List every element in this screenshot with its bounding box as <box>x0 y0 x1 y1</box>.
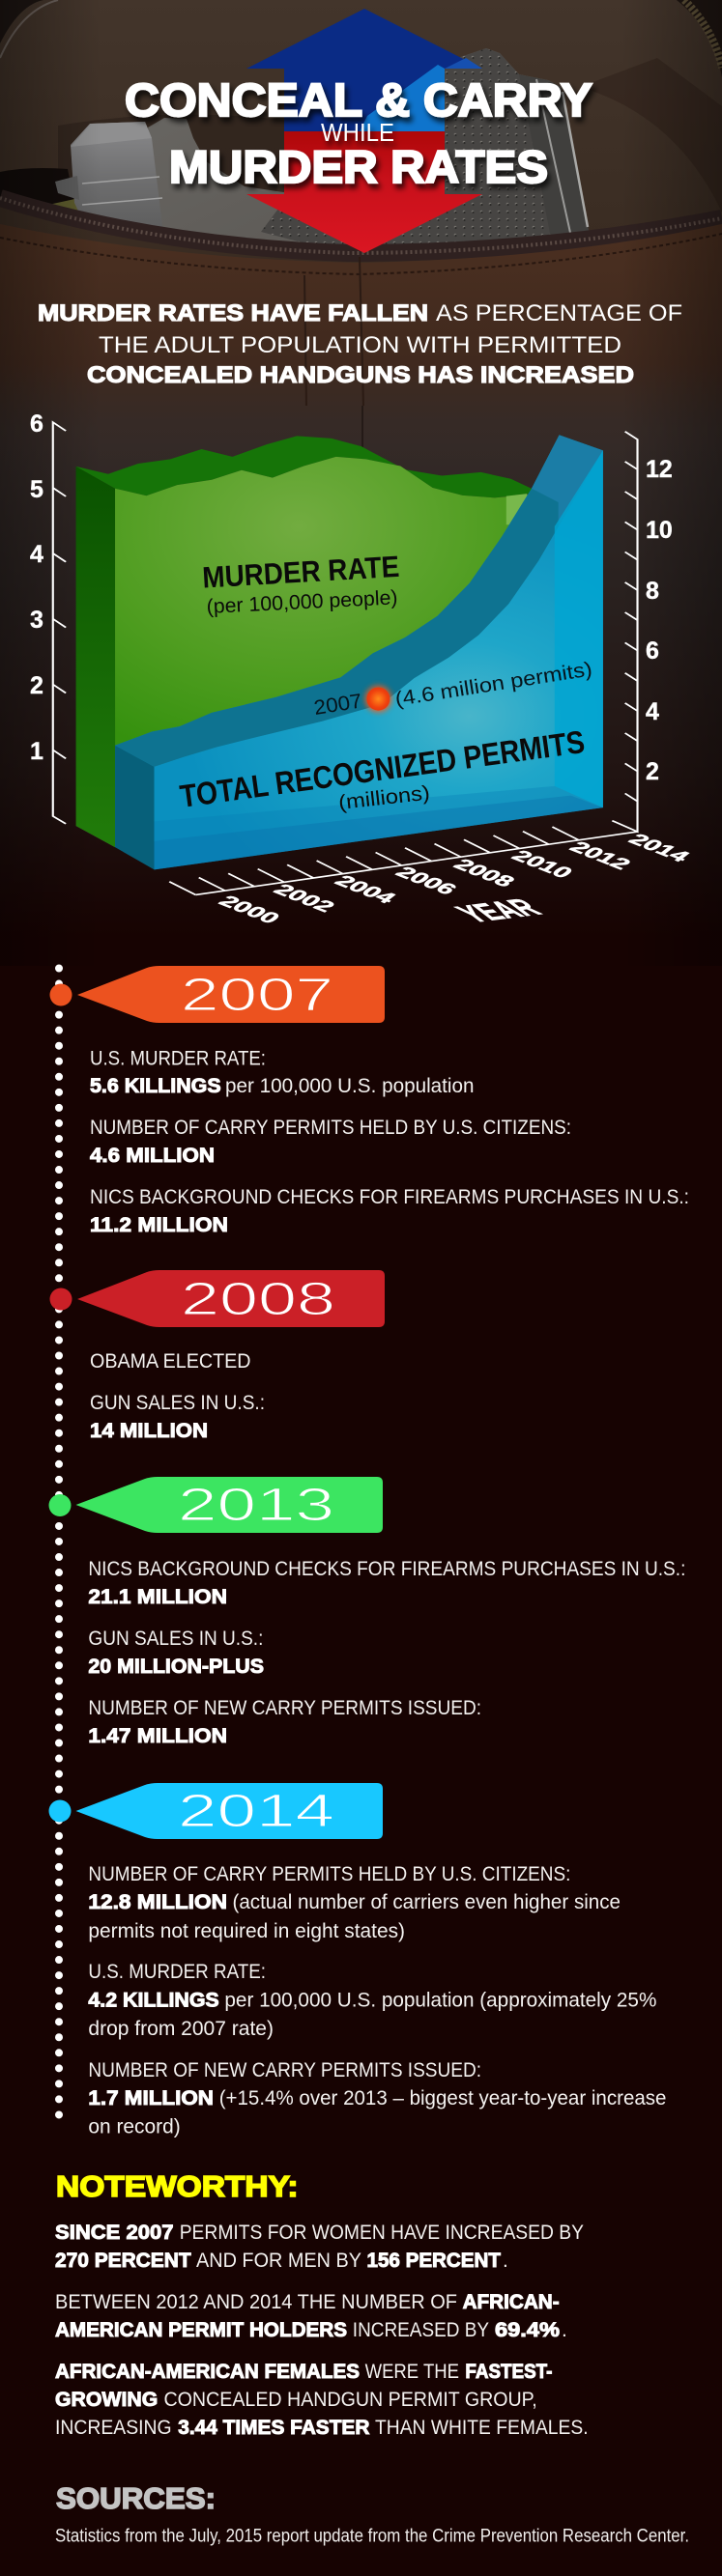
noteworthy facts: AFRICAN-AMERICAN FEMALES <box>55 2361 360 2383</box>
noteworthy facts: WERE THE <box>365 2361 459 2383</box>
timeline dotted line <box>55 968 63 2131</box>
2013 facts <box>88 1558 685 1747</box>
noteworthy facts: INCREASED BY <box>353 2319 489 2341</box>
title: MURDER RATES <box>169 141 548 192</box>
2013 facts: NUMBER OF NEW CARRY PERMITS ISSUED: <box>88 1697 481 1719</box>
murder rate label <box>201 550 400 618</box>
year axis labels: 2014 <box>623 831 695 865</box>
2014 facts: 4.2 KILLINGS <box>88 1990 219 2011</box>
subheading <box>38 300 682 388</box>
timeline marker 2013: 2013 <box>178 1480 334 1531</box>
year axis labels: 2002 <box>269 881 339 916</box>
2007 marker callout: (4.6 million permits) <box>393 658 593 711</box>
noteworthy facts: FASTEST- <box>465 2361 552 2383</box>
2007 facts: U.S. MURDER RATE: <box>90 1047 266 1070</box>
permits blue area <box>115 435 603 869</box>
2007 facts: 5.6 KILLINGS <box>90 1075 221 1097</box>
noteworthy facts: INCREASING <box>55 2417 172 2439</box>
year axis labels: 2012 <box>564 838 636 873</box>
icon: blue up arrow and red down arrow <box>246 9 482 253</box>
year axis labels <box>214 831 695 927</box>
2008 facts: 14 MILLION <box>90 1420 208 1442</box>
noteworthy facts: AND FOR MEN BY <box>196 2250 361 2272</box>
noteworthy facts: AMERICAN PERMIT HOLDERS <box>55 2319 347 2341</box>
noteworthy facts: CONCEALED HANDGUN PERMIT GROUP, <box>164 2389 537 2411</box>
right axis labels: 8 <box>646 578 659 605</box>
noteworthy facts: . <box>562 2319 567 2341</box>
left axis labels <box>30 410 43 765</box>
2007 facts: per 100,000 U.S. population <box>225 1075 474 1097</box>
noteworthy facts: BETWEEN 2012 AND 2014 THE NUMBER OF <box>55 2291 457 2313</box>
2014 facts: NUMBER OF NEW CARRY PERMITS ISSUED: <box>88 2059 481 2081</box>
noteworthy facts: 69.4% <box>495 2319 560 2341</box>
sources heading: SOURCES: <box>56 2481 216 2515</box>
right axis labels: 6 <box>646 637 659 665</box>
left axis labels: 4 <box>30 541 43 568</box>
noteworthy facts <box>55 2222 589 2439</box>
title <box>125 75 592 192</box>
2008 facts: OBAMA ELECTED <box>90 1350 251 1373</box>
2014 facts: permits not required in eight states) <box>88 1920 405 1942</box>
year axis title: YEAR <box>448 894 549 927</box>
2007 marker callout <box>312 658 593 720</box>
2013 facts: 1.47 MILLION <box>88 1725 227 1747</box>
timeline marker 2007 <box>50 966 385 1023</box>
2008 facts <box>90 1350 265 1442</box>
2014 facts: per 100,000 U.S. population (approximately 25% <box>224 1990 656 2011</box>
left axis labels: 3 <box>30 607 43 634</box>
noteworthy facts: 156 PERCENT <box>367 2250 501 2272</box>
subheading: AS PERCENTAGE OF <box>436 300 682 326</box>
right axis labels: 4 <box>646 698 659 725</box>
2014 facts: 12.8 MILLION <box>88 1891 227 1913</box>
noteworthy facts: 3.44 TIMES FASTER <box>178 2417 369 2439</box>
title: WHILE <box>321 118 394 147</box>
timeline marker 2013 <box>48 1477 383 1533</box>
2013 facts: GUN SALES IN U.S.: <box>88 1628 263 1650</box>
year axis labels: 2010 <box>506 847 578 882</box>
year axis labels: 2006 <box>390 863 462 898</box>
timeline marker 2008: 2008 <box>181 1274 335 1325</box>
murder rate label: MURDER RATE <box>201 550 400 595</box>
2014 facts <box>88 1863 666 2138</box>
2014 facts: drop from 2007 rate) <box>88 2018 274 2040</box>
2007 facts: 11.2 MILLION <box>90 1214 228 1236</box>
timeline marker 2008 <box>50 1270 385 1327</box>
2013 facts: 20 MILLION-PLUS <box>88 1656 264 1678</box>
2014 facts: 1.7 MILLION <box>88 2087 214 2109</box>
year axis labels: 2004 <box>330 872 401 907</box>
left axis labels: 2 <box>30 672 43 699</box>
noteworthy facts: 270 PERCENT <box>55 2250 191 2272</box>
noteworthy facts: PERMITS FOR WOMEN HAVE INCREASED BY <box>180 2222 584 2244</box>
left axis labels: 6 <box>30 410 43 438</box>
subheading: THE ADULT POPULATION WITH PERMITTED <box>99 332 621 358</box>
3D area chart <box>30 410 695 927</box>
left axis labels: 1 <box>30 738 43 765</box>
icon: handgun in the bag <box>55 48 590 257</box>
noteworthy facts: THAN WHITE FEMALES. <box>375 2417 589 2439</box>
total recognized permits label: (millions) <box>337 782 431 814</box>
right axis labels: 10 <box>646 517 673 544</box>
right axis labels: 12 <box>646 456 673 483</box>
timeline marker 2007: 2007 <box>181 970 333 1021</box>
right axis labels <box>646 456 673 785</box>
noteworthy facts: AFRICAN- <box>463 2291 560 2313</box>
2014 facts: NUMBER OF CARRY PERMITS HELD BY U.S. CITIZENS: <box>88 1863 570 1885</box>
leather backpack photo header <box>0 0 722 966</box>
year axis labels: 2000 <box>214 892 285 927</box>
timeline marker 2014: 2014 <box>178 1786 334 1837</box>
right axis labels: 2 <box>646 758 659 785</box>
murder rate label: (per 100,000 people) <box>206 586 398 618</box>
subheading: MURDER RATES HAVE FALLEN <box>38 300 428 326</box>
noteworthy facts: . <box>503 2250 508 2272</box>
timeline marker 2014 <box>48 1783 383 1839</box>
chart axes <box>53 422 638 894</box>
2007 facts: NUMBER OF CARRY PERMITS HELD BY U.S. CITIZENS: <box>90 1117 571 1139</box>
2007 marker callout: 2007 <box>312 690 363 720</box>
2014 facts: (actual number of carriers even higher since <box>232 1891 621 1913</box>
2008 facts: GUN SALES IN U.S.: <box>90 1392 265 1414</box>
2013 facts: 21.1 MILLION <box>88 1586 227 1608</box>
murder rate green area <box>76 436 560 847</box>
2007 facts <box>90 1047 689 1236</box>
2014 facts: U.S. MURDER RATE: <box>88 1961 266 1983</box>
total recognized permits label: TOTAL RECOGNIZED PERMITS <box>178 723 587 814</box>
year axis labels: 2008 <box>448 856 520 891</box>
left axis labels: 5 <box>30 476 43 503</box>
2007 facts: 4.6 MILLION <box>90 1145 215 1167</box>
title: CONCEAL & CARRY <box>125 75 592 127</box>
subheading: CONCEALED HANDGUNS HAS INCREASED <box>87 362 634 388</box>
noteworthy facts: GROWING <box>55 2389 158 2411</box>
2014 facts: (+15.4% over 2013 – biggest year-to-year increase <box>219 2087 666 2109</box>
2014 facts: on record) <box>88 2115 181 2138</box>
noteworthy facts: SINCE 2007 <box>55 2222 174 2244</box>
noteworthy heading: NOTEWORTHY: <box>56 2169 299 2203</box>
